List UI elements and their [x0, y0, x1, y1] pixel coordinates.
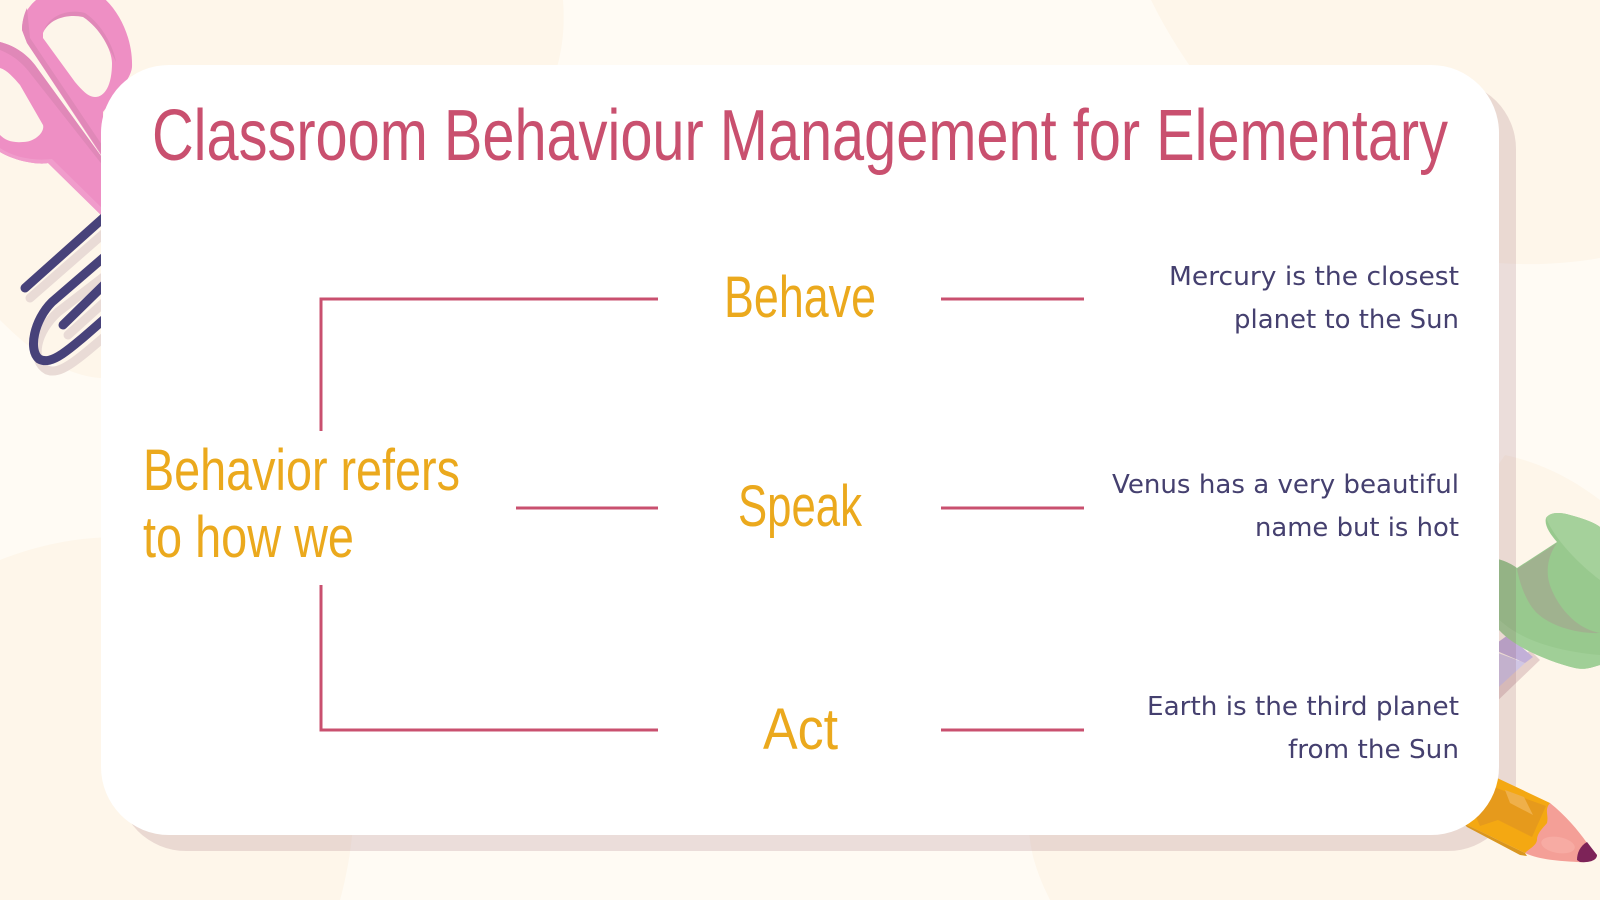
icon: lavender object behind plant — [1490, 635, 1540, 708]
description: Venus: name but is hot — [1255, 513, 1459, 543]
description: Venus: Venus has a very beautiful — [1112, 470, 1459, 500]
description: Earth: from the Sun — [1288, 735, 1459, 765]
root label — [143, 438, 460, 570]
icon: scissors — [0, 0, 132, 218]
label: Behave: Behave — [724, 265, 876, 330]
root label: Behavior refers — [143, 438, 460, 503]
description: Earth — [1147, 692, 1459, 765]
root label: to how we — [143, 505, 354, 570]
tree connector lines — [321, 299, 1084, 730]
label: Speak: Speak — [738, 474, 863, 539]
description: Earth: Earth is the third planet — [1147, 692, 1459, 722]
card shadow — [118, 81, 1516, 851]
icon: paperclip — [25, 212, 110, 371]
description: Mercury: Mercury is the closest — [1169, 262, 1459, 292]
label: Act: Act — [763, 697, 838, 762]
description: Mercury: planet to the Sun — [1234, 305, 1459, 335]
icon: green plant — [1490, 513, 1600, 669]
description: Venus — [1112, 470, 1459, 543]
panel: white card — [101, 65, 1499, 835]
icon: pencil — [1463, 777, 1597, 862]
description: Mercury — [1169, 262, 1459, 335]
